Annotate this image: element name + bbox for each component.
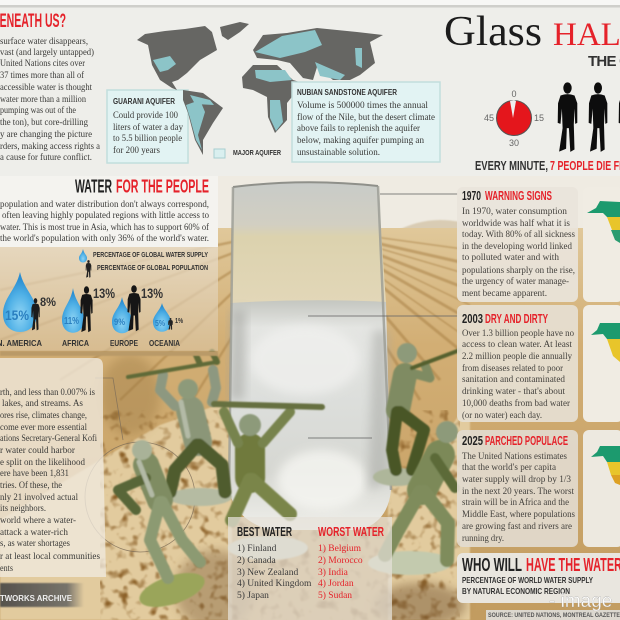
panel: best and worst water: WORST WATER — [318, 524, 384, 539]
panel: water for the people — [0, 176, 218, 356]
text: Nubian Sandstone aquifer: below, making aquifer pumping an — [297, 135, 424, 146]
text: Guarani aquifer: to 5.5 billion people — [113, 133, 182, 144]
panel: best and worst water: 5) Japan — [237, 590, 269, 601]
text: Nubian Sandstone aquifer: unsustainable solution. — [297, 147, 380, 158]
text: Nubian Sandstone aquifer: Volume is 500000 times the annual — [297, 100, 428, 111]
callout box: Guarani — [107, 90, 188, 163]
callout box: Nubian Sandstone — [292, 82, 440, 162]
title: Glass — [444, 9, 542, 55]
panel: left conflict text: ores rise, climates change, — [0, 410, 87, 421]
panel: 2025 parched populace: in the next 20 years. The worst — [462, 486, 574, 497]
text block: beneath us — [0, 36, 101, 163]
panel: 2003 dry and dirty: drinking water - that's about — [462, 386, 565, 397]
panel: best and worst water: 2) Canada — [237, 555, 277, 566]
panel: left conflict text: tries. Of these, the — [0, 480, 62, 491]
text: Nubian Sandstone aquifer: NUBIAN SANDSTONE AQUIFER — [297, 88, 397, 97]
panel: left conflict text: ents — [0, 563, 13, 574]
panel: 2025 parched populace: Middle East, where populations — [462, 509, 575, 520]
text block: beneath us: surface water disappears, — [0, 36, 88, 47]
panel: 2003 dry and dirty: 2003 — [462, 311, 483, 326]
panel: left conflict text: e split on the likelihood — [0, 457, 85, 468]
soldier: foreground right — [368, 421, 458, 575]
caption: every minute — [475, 158, 620, 173]
drop chart: Africa: 13% — [93, 285, 115, 301]
chart legend: PERCENTAGE OF GLOBAL POPULATION — [97, 263, 208, 272]
drop chart: Europe: EUROPE — [110, 338, 138, 348]
map panel: 2003 — [583, 305, 620, 422]
desert photo background — [0, 176, 620, 620]
paragraph — [0, 199, 210, 244]
drop chart: North America: 8% — [40, 295, 56, 309]
panel: 1970 warning signs: WARNING SIGNS — [485, 188, 552, 203]
major aquifer areas — [153, 30, 362, 150]
panel: left conflict text: rth, and less than 0.007% is — [0, 387, 95, 398]
panel: best and worst water: 4) Jordan — [318, 578, 354, 589]
world map land — [137, 22, 383, 155]
drop chart: Africa — [62, 285, 115, 348]
paragraph: population and water distribution don't always correspond, — [0, 199, 209, 210]
panel: water for the people: FOR THE PEOPLE — [116, 176, 209, 196]
text: Guarani aquifer: Could provide 100 — [113, 110, 178, 121]
drop chart: Africa: AFRICA — [62, 338, 89, 348]
panel: 1970 warning signs: populations sharply on the rise, — [462, 265, 575, 276]
drop chart: Oceania: 1% — [175, 318, 184, 325]
panel: 2025 parched populace: 2025 — [462, 433, 483, 448]
text block: beneath us: the ton), but core-drilling — [0, 117, 88, 128]
caption: every minute: EVERY MINUTE, — [475, 158, 548, 173]
panel: 2025 parched populace: PARCHED POPULACE — [485, 433, 568, 448]
panel: 1970 warning signs — [457, 187, 578, 302]
panel: 2025 parched populace: are growing fast and rivers are — [462, 521, 572, 532]
panel: left conflict text: come ever more essential — [0, 422, 87, 433]
watermark: - image — [549, 591, 612, 612]
drop chart: Oceania: 5% — [155, 319, 165, 328]
panel: best and worst water: 3) India — [318, 567, 349, 578]
text block: beneath us: water more than a million — [0, 94, 86, 105]
panel: 2025 parched populace: that the world's per capita — [462, 462, 557, 473]
drop chart: Oceania: OCEANIA — [149, 338, 180, 348]
clock chart — [484, 89, 544, 148]
panel: left conflict text: nly 21 involved actual — [0, 492, 78, 503]
credit bar — [0, 583, 84, 607]
panel: 1970 warning signs: the urgency of water manage- — [462, 276, 569, 287]
panel: 2003 dry and dirty: DRY AND DIRTY — [485, 311, 548, 326]
panel: 2003 dry and dirty: (or no water) each day. — [462, 410, 542, 421]
chart legend — [79, 249, 208, 278]
clock chart: 30 — [509, 138, 519, 148]
panel: left conflict text: lakes, and streams. As — [2, 398, 83, 409]
panel: 1970 warning signs: in the developing world linked — [462, 241, 572, 252]
clock chart: 0 — [511, 89, 517, 99]
panel: best and worst water: 5) Sudan — [318, 590, 352, 601]
text: Nubian Sandstone aquifer: above fails to replenish the aquifer — [297, 123, 421, 134]
panel: 2025 parched populace: The United Nations estimates — [462, 451, 567, 462]
chart legend: PERCENTAGE OF GLOBAL WATER SUPPLY — [93, 250, 208, 259]
panel: left conflict text: world where a water- — [0, 515, 76, 526]
drop chart: Oceania — [149, 303, 184, 348]
panel: left conflict text: ations Secretary-General Kofi — [0, 433, 97, 444]
glass of water — [229, 182, 391, 530]
panel: 2003 dry and dirty — [457, 305, 578, 422]
text: Nubian Sandstone aquifer — [297, 88, 435, 158]
panel: 1970 warning signs: today. With 80% of all sickness — [462, 229, 575, 240]
drop chart: North America: 15% — [5, 307, 29, 323]
panel: 1970 warning signs: ment became apparent. — [462, 288, 547, 299]
panel: 2025 parched populace — [457, 430, 578, 547]
text block: beneath us: a cause for future conflict. — [0, 152, 92, 163]
text block: beneath us: rders, making access rights a — [0, 141, 101, 152]
panel: 1970 warning signs: 1970 — [462, 188, 481, 203]
panel: left conflict text — [0, 358, 106, 577]
panel: who will have the water — [457, 553, 620, 603]
drop chart: Europe: 13% — [141, 285, 163, 301]
panel: best and worst water: 2) Morocco — [318, 555, 363, 566]
panel: 2003 dry and dirty: from diseases related to poor — [462, 363, 564, 374]
panel: 2025 parched populace: water supply will drop by 1/3 — [462, 474, 571, 485]
text block: beneath us: vast (and largely untapped) — [0, 47, 94, 58]
panel: best and worst water: 1) Finland — [237, 543, 277, 554]
panel: best and worst water: BEST WATER — [237, 524, 292, 539]
connector lines — [308, 194, 458, 438]
panel: 2025 parched populace: running dry. — [462, 533, 504, 544]
panel: left conflict text: r water could harbor — [0, 445, 76, 456]
panel: left conflict text: s, as water shortages — [0, 538, 70, 549]
heading: WATER — [75, 176, 112, 196]
panel: best and worst water — [228, 517, 392, 620]
panel: left conflict text: attack a water-rich — [0, 527, 68, 538]
panel: 2003 dry and dirty: access to clean water. At least — [462, 339, 572, 350]
soldier: back left with raised rifle — [128, 352, 232, 506]
panel: who will have the water: WHO WILL — [462, 555, 522, 575]
text: Nubian Sandstone aquifer: flow of the Nile, but the desert climate — [297, 112, 435, 123]
legend: major aquifer — [214, 149, 281, 158]
panel: left conflict text: its neighbors. — [0, 503, 46, 514]
map panel: 1970 — [583, 187, 620, 302]
panel: 1970 warning signs: worldwide was half what it is — [462, 218, 570, 229]
panel: best and worst water: 1) Belgium — [318, 543, 362, 554]
legend: major aquifer: MAJOR AQUIFER — [233, 150, 281, 157]
panel: 2025 parched populace: strain will be in Africa and the — [462, 497, 569, 508]
paragraph: water. This is most true in Asia, which has to support 60% of — [0, 222, 210, 233]
water body — [229, 300, 391, 530]
panel: left conflict text: ere have been 1,831 — [0, 468, 69, 479]
clock chart: 45 — [484, 113, 494, 123]
text: Guarani aquifer: for 200 years — [113, 145, 160, 156]
cracked ground — [0, 355, 470, 620]
thin circle callout — [85, 378, 195, 552]
map panel background: world — [107, 22, 383, 163]
panel: 2003 dry and dirty: Over 1.3 billion people have no — [462, 328, 574, 339]
text block: beneath us: accessible water is thought — [0, 82, 92, 93]
panel: best and worst water: 3) New Zealand — [237, 567, 298, 578]
soldier: right kneeling with rifle — [373, 343, 460, 486]
text block: beneath us: United Nations cites over — [0, 58, 86, 69]
text block: beneath us: 37 times more than all of — [0, 70, 85, 81]
text: Guarani aquifer — [113, 97, 183, 156]
source line — [486, 610, 620, 620]
clock chart: 15 — [534, 113, 544, 123]
title — [444, 9, 620, 70]
text: Guarani aquifer: liters of water a day — [113, 122, 183, 133]
panel: best and worst water: 4) United Kingdom — [237, 578, 312, 589]
top background band — [0, 0, 620, 176]
panel: 1970 warning signs: In 1970, water consumption — [462, 206, 567, 217]
text block: beneath us: y are changing the picture — [0, 129, 92, 140]
drop chart: North America — [0, 272, 56, 348]
credit bar: TWORKS ARCHIVE — [0, 594, 73, 603]
panel: who will have the water: BY NATURAL ECONOMIC REGION — [462, 586, 570, 596]
soldier: foreground left — [118, 440, 209, 614]
soldier: centre with bazooka — [214, 404, 322, 560]
people silhouettes — [558, 82, 620, 152]
drop chart: Europe — [110, 285, 163, 348]
panel: 2003 dry and dirty: 2.2 million people die annually — [462, 351, 572, 362]
panel: 2003 dry and dirty: sanitation and contaminated — [462, 374, 565, 385]
paragraph: the world's population with only 36% of the world's water. — [0, 233, 209, 244]
text block: beneath us: pumping was out of the — [0, 105, 76, 116]
panel: left conflict text: r at least local communities — [0, 551, 100, 562]
text: Guarani aquifer: GUARANI AQUIFER — [113, 97, 175, 106]
paragraph: often leaving highly populated regions with little access to — [2, 210, 209, 221]
panel: 2003 dry and dirty: 10,000 deaths from bad water — [462, 398, 571, 409]
map panel: 2025 — [583, 430, 620, 547]
glass upper empty section — [231, 182, 386, 303]
drop chart: Europe: 9% — [114, 317, 125, 327]
drop chart: Africa: 11% — [64, 316, 79, 327]
panel: 1970 warning signs: to polluted water and with — [462, 252, 559, 263]
